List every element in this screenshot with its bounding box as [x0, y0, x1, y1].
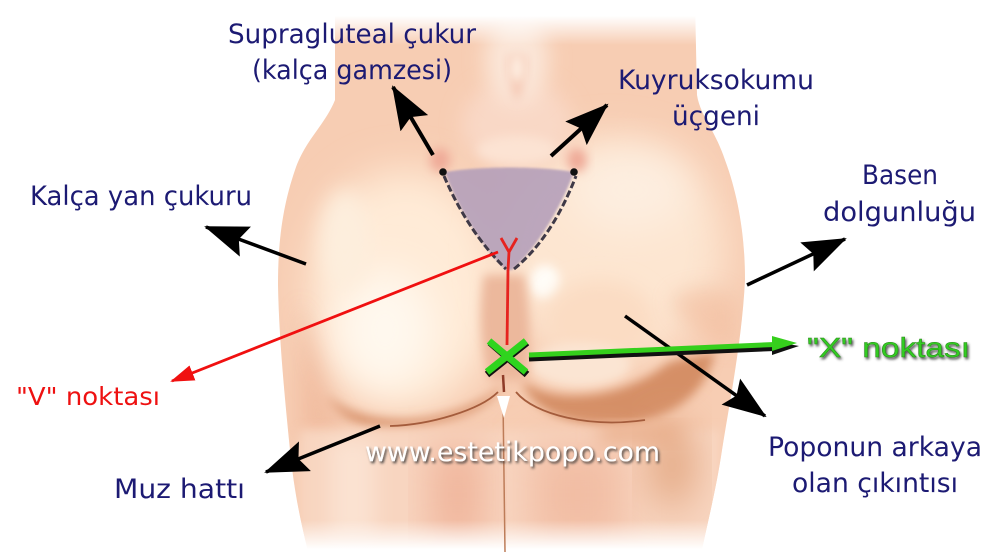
- label: Poponun: [768, 432, 982, 499]
- label: X noktası: "X" noktası: [807, 332, 970, 363]
- label: V noktası: "V" noktası: [16, 382, 160, 411]
- illustration: torso: [270, 0, 750, 559]
- arrow: V noktası: [172, 252, 498, 381]
- arrow: Poponun: [625, 316, 765, 416]
- label: Supragluteal: [228, 19, 477, 86]
- label: Basen: [823, 160, 976, 228]
- label: Poponun: Poponun arkaya: [768, 432, 982, 463]
- arrow: Basen: [747, 239, 845, 285]
- X mark: [487, 341, 527, 374]
- label: Kalça yan çukuru: Kalça yan çukuru: [30, 181, 252, 212]
- coccyx triangle: [439, 168, 578, 270]
- label: Kuyruksokumu: [618, 65, 814, 132]
- label: Supragluteal: (kalça gamzesi): [252, 55, 452, 86]
- label: Supragluteal: Supragluteal çukur: [228, 19, 477, 50]
- white triangle mark: [497, 396, 510, 418]
- arrow: Kalça yan çukuru: [206, 227, 306, 264]
- top and bottom fade: [270, 0, 750, 559]
- label: Kuyruksokumu: üçgeni: [672, 101, 760, 132]
- arrow: Muz hattı: [266, 426, 380, 472]
- arrow: X noktası: [529, 336, 799, 359]
- gluteal fold lines: [390, 375, 645, 552]
- red V mark and midline: [501, 238, 517, 345]
- watermark: www.estetikpopo.com: [365, 437, 660, 468]
- arrow: Kuyruksokumu: [551, 105, 607, 156]
- label: Basen: dolgunluğu: [823, 197, 976, 228]
- label: Basen: Basen: [862, 160, 938, 191]
- arrow: Supragluteal: [393, 87, 433, 155]
- label: Kuyruksokumu: Kuyruksokumu: [618, 65, 814, 96]
- label: Poponun: olan çıkıntısı: [792, 468, 958, 499]
- label: Muz hattı: Muz hattı: [114, 474, 245, 505]
